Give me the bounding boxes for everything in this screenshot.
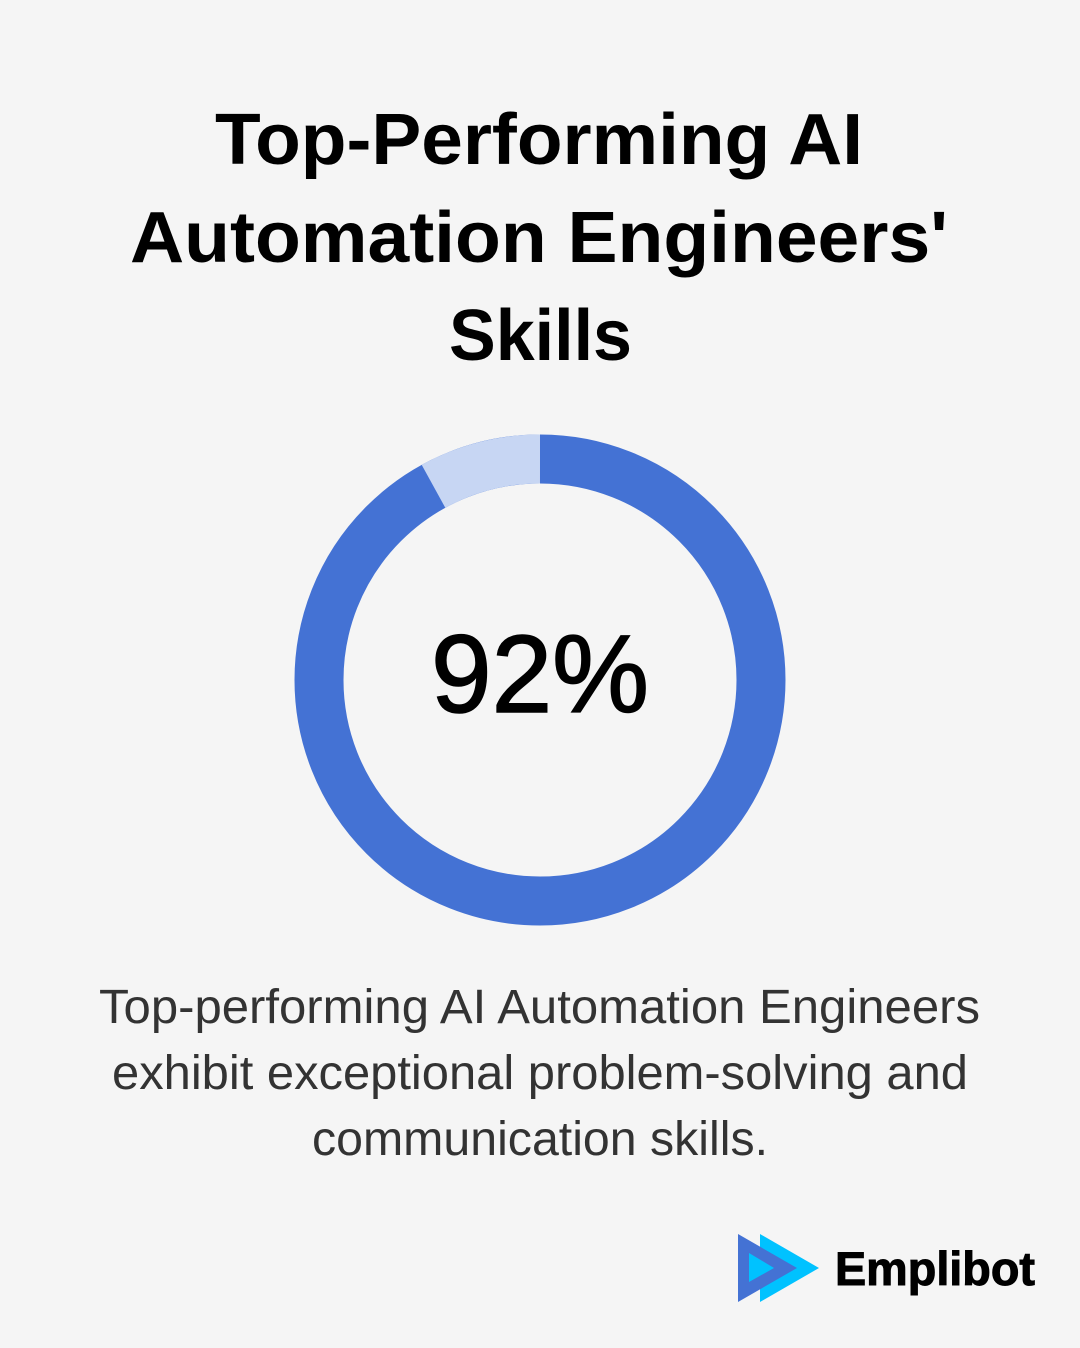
remaining ring segment: 8% <box>434 459 540 486</box>
title: Automation Engineers' <box>130 198 948 278</box>
center value: 92% <box>431 613 649 736</box>
description text: exhibit exceptional problem-solving and <box>112 1047 968 1100</box>
donut chart: 92% <box>319 459 761 901</box>
logo: Emplibot <box>738 1234 1035 1302</box>
description text: communication skills. <box>312 1113 768 1166</box>
title: Skills <box>449 296 632 376</box>
description text: Top-performing AI Automation Engineers <box>99 981 980 1034</box>
icon: play triangles <box>738 1234 819 1302</box>
filled ring segment: 92% <box>319 459 761 901</box>
title: Top-Performing AI <box>215 100 863 180</box>
wordmark: Emplibot <box>835 1242 1035 1295</box>
title <box>130 100 948 376</box>
description text <box>99 981 980 1166</box>
